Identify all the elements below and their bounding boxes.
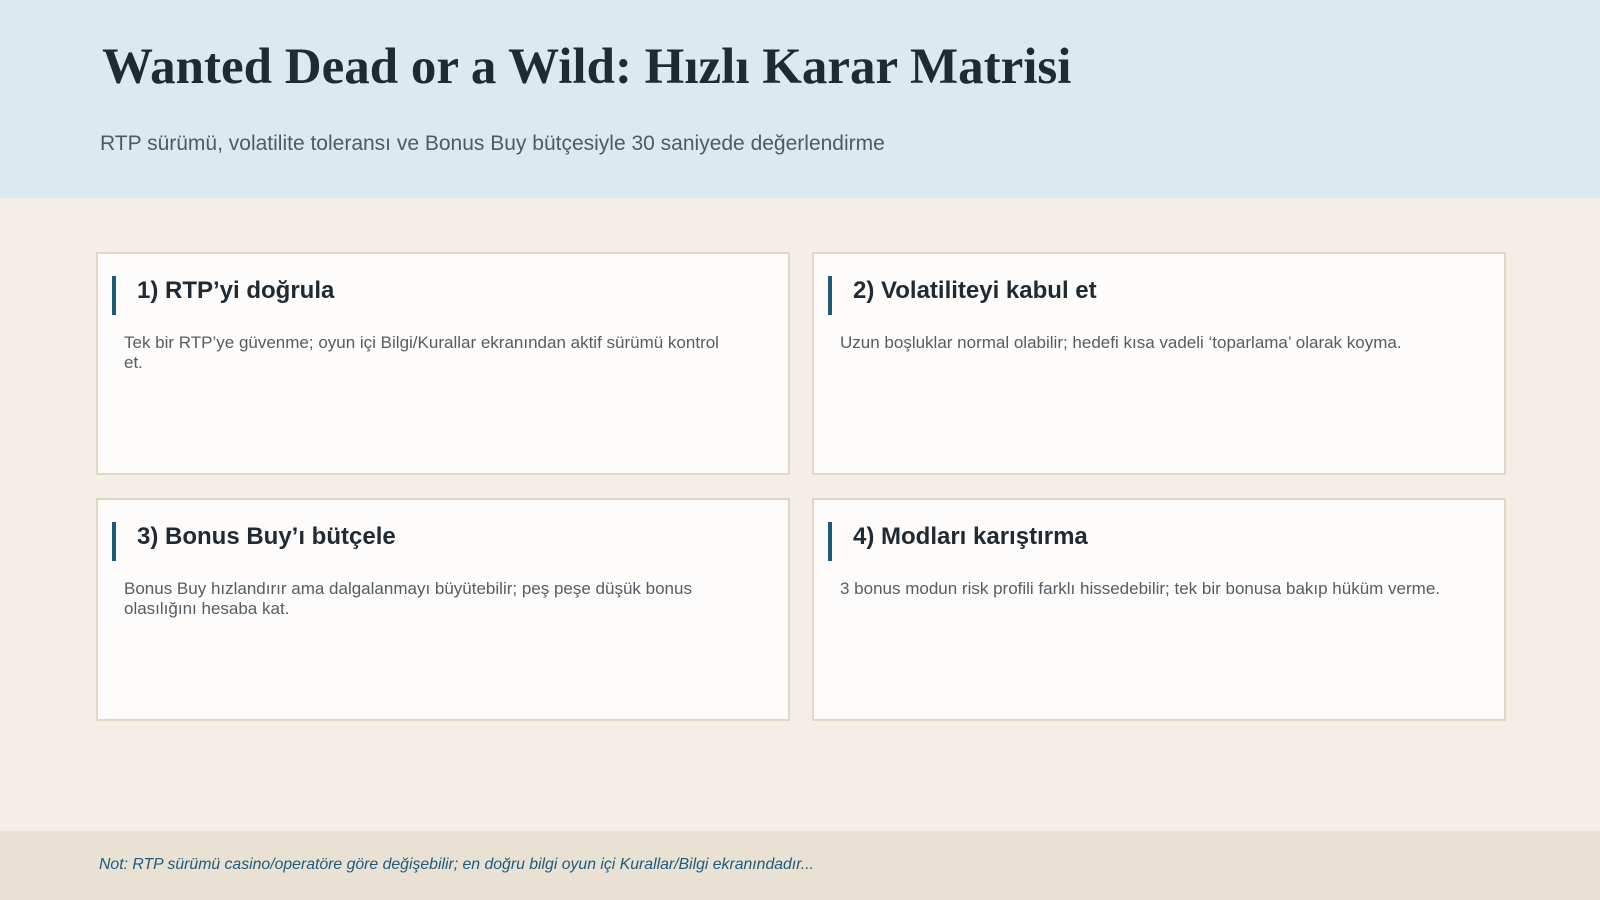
heading: 1) RTP’yi doğrula — [137, 277, 334, 304]
heading: 3) Bonus Buy’ı bütçele — [137, 523, 396, 550]
heading: 2) Volatiliteyi kabul et — [853, 277, 1097, 304]
text: Bonus Buy hızlandırır ama dalgalanmayı büyütebilir; peş peşe düşük bonus olasılığını hesaba kat. — [124, 579, 692, 618]
panel: bonus buy — [96, 498, 790, 721]
panel: RTP — [96, 252, 790, 475]
header band — [0, 0, 1600, 198]
text: Tek bir RTP’ye güvenme; oyun içi Bilgi/Kurallar ekranından aktif sürümü kontrol et. — [124, 333, 719, 372]
accent bar — [828, 522, 832, 561]
text: 3 bonus modun risk profili farklı hissedebilir; tek bir bonusa bakıp hüküm verme. — [840, 579, 1440, 598]
accent bar — [828, 276, 832, 315]
accent bar — [112, 522, 116, 561]
heading: 4) Modları karıştırma — [853, 523, 1088, 550]
panel: volatility — [812, 252, 1506, 475]
text: Uzun boşluklar normal olabilir; hedefi kısa vadeli ‘toparlama’ olarak koyma. — [840, 333, 1402, 352]
title: Wanted Dead or a Wild: Hızlı Karar Matrisi — [102, 39, 1071, 95]
subtitle: RTP sürümü, volatilite toleransı ve Bonus Buy bütçesiyle 30 saniyede değerlendirme — [100, 132, 885, 155]
accent bar — [112, 276, 116, 315]
panel: modes — [812, 498, 1506, 721]
footer — [0, 831, 1600, 900]
footer note: Not: RTP sürümü casino/operatöre göre değişebilir; en doğru bilgi oyun içi Kurallar/Bilgi ekranındadır... — [99, 856, 814, 873]
